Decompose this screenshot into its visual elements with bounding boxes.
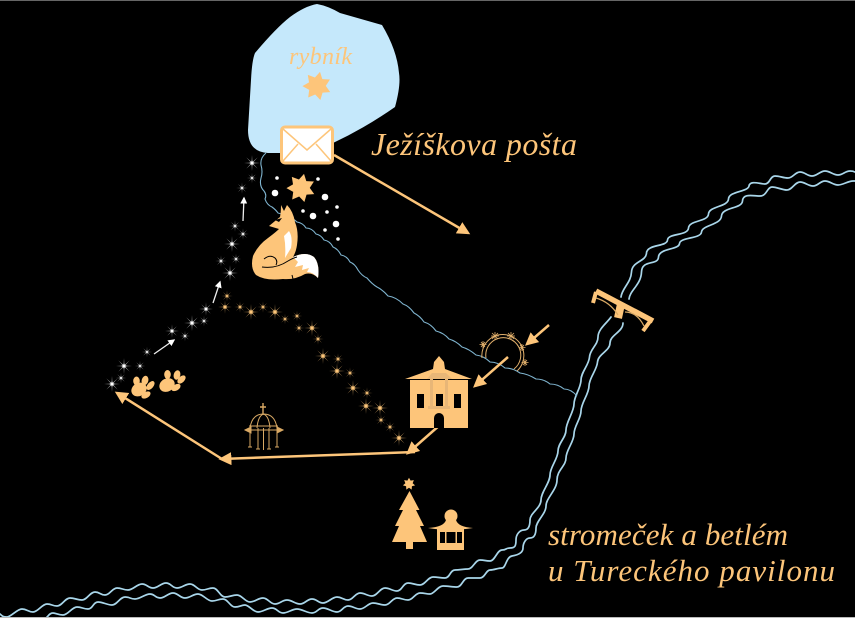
orange sparkle trail bbox=[218, 290, 407, 446]
icon: pond star bbox=[300, 69, 334, 102]
icon: chateau bbox=[405, 356, 472, 428]
stream bbox=[260, 153, 577, 396]
label: u Tureckého pavilonu: u Tureckého pavilonu bbox=[548, 553, 835, 588]
icon: wreath arch bbox=[480, 332, 528, 371]
arrow: from envelope bbox=[334, 155, 468, 233]
white direction arrows bbox=[154, 198, 244, 354]
icon: gazebo bbox=[245, 403, 283, 450]
snow dots bbox=[272, 176, 340, 241]
white sparkle trail bbox=[104, 155, 260, 392]
label: stromeček a betlém: stromeček a betlém bbox=[548, 517, 788, 552]
icon: paw prints bbox=[129, 370, 187, 400]
heading: Ježíškova pošta: Ježíškova pošta bbox=[371, 126, 577, 162]
label: rybník: rybník bbox=[289, 44, 352, 70]
icon: Turkish pavilion bbox=[428, 510, 473, 550]
pond bbox=[248, 4, 400, 153]
icon: envelope bbox=[282, 127, 332, 163]
river bbox=[0, 171, 855, 617]
icon: star by fox bbox=[284, 171, 318, 204]
icon: bridge bbox=[593, 291, 653, 331]
icon: Christmas tree bbox=[392, 478, 427, 549]
route arrows bbox=[117, 325, 549, 459]
icon: fox bbox=[252, 205, 318, 280]
